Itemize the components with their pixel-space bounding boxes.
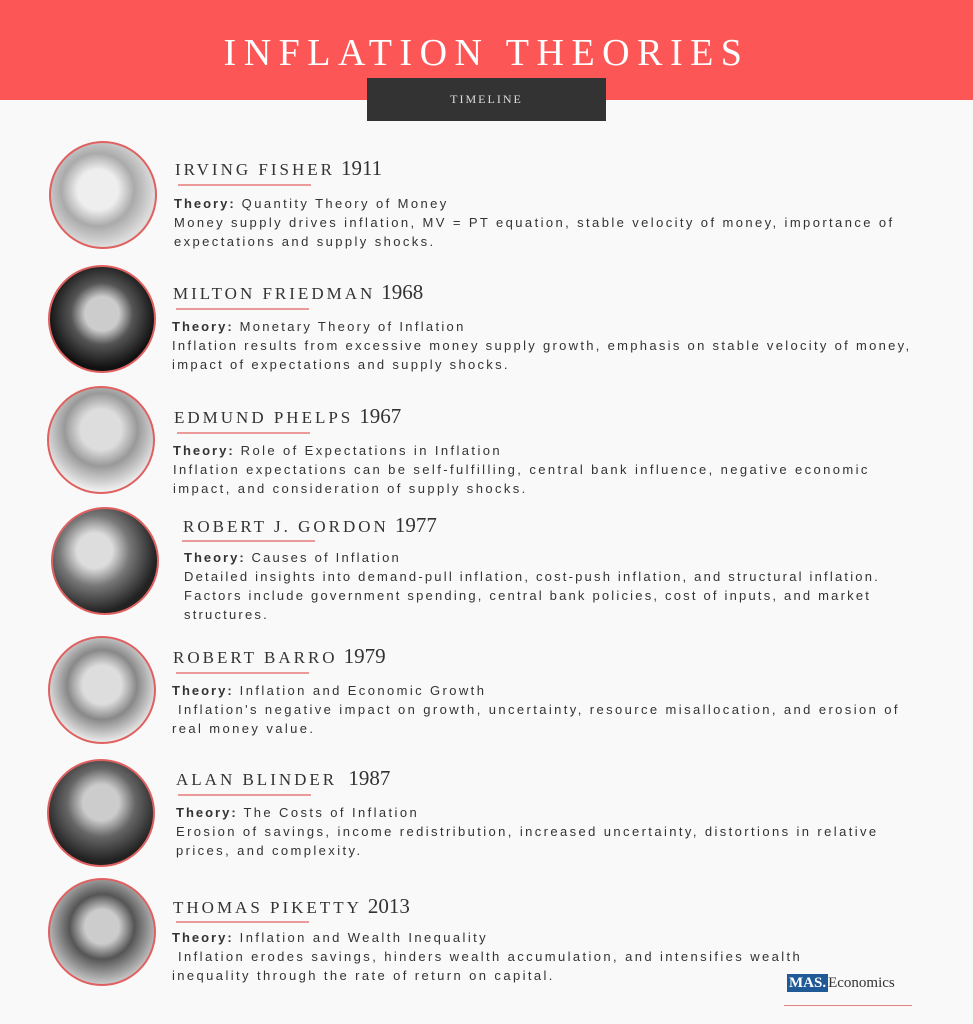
entry: Milton Friedman <box>48 265 911 373</box>
title: INFLATION THEORIES <box>224 32 749 74</box>
text: expectations and supply shocks. <box>174 234 436 249</box>
text: Factors include government spending, central bank policies, cost of inputs, and market <box>184 588 871 603</box>
entry: Edmund Phelps <box>47 386 870 496</box>
text: Theory: Causes of Inflation <box>184 550 401 565</box>
text: Detailed insights into demand-pull inflation, cost-push inflation, and structural inflation. <box>184 569 880 584</box>
text: Money supply drives inflation, MV = PT equation, stable velocity of money, importance of <box>174 215 895 230</box>
entry: Robert Barro <box>48 636 900 744</box>
text: Inflation erodes savings, hinders wealth accumulation, and intensifies wealth <box>178 949 802 964</box>
text: Theory: Role of Expectations in Inflation <box>173 443 502 458</box>
name: THOMAS PIKETTY 2013 <box>173 894 410 918</box>
text: Erosion of savings, income redistribution, increased uncertainty, distortions in relative <box>176 824 879 839</box>
text <box>174 196 895 249</box>
name: ALAN BLINDER 1987 <box>176 766 390 790</box>
portrait <box>48 636 156 744</box>
name: ROBERT J. GORDON 1977 <box>183 513 437 537</box>
text <box>172 683 900 736</box>
name: IRVING FISHER 1911 <box>175 156 382 180</box>
text: Inflation expectations can be self-fulfilling, central bank influence, negative economic <box>173 462 870 477</box>
text: Theory: Inflation and Wealth Inequality <box>172 930 488 945</box>
header band <box>0 0 973 100</box>
text: Inflation results from excessive money supply growth, emphasis on stable velocity of money, <box>172 338 911 353</box>
portrait <box>47 759 155 867</box>
entry: Alan Blinder <box>47 759 879 867</box>
text <box>173 443 870 496</box>
entry: Thomas Piketty <box>48 878 802 986</box>
text: Theory: Quantity Theory of Money <box>174 196 449 211</box>
text <box>172 319 911 372</box>
text: Theory: Inflation and Economic Growth <box>172 683 486 698</box>
entry: Robert J. Gordon <box>51 507 880 622</box>
text <box>172 930 802 983</box>
text: prices, and complexity. <box>176 843 362 858</box>
name: MILTON FRIEDMAN 1968 <box>173 280 423 304</box>
entry: Irving Fisher <box>49 141 895 249</box>
text <box>184 550 880 622</box>
text: Theory: The Costs of Inflation <box>176 805 419 820</box>
text: impact of expectations and supply shocks. <box>172 357 510 372</box>
portrait <box>49 141 157 249</box>
text: structures. <box>184 607 269 622</box>
text: Inflation's negative impact on growth, uncertainty, resource misallocation, and erosion of <box>178 702 900 717</box>
name: ROBERT BARRO 1979 <box>173 644 386 668</box>
portrait <box>48 878 156 986</box>
portrait <box>48 265 156 373</box>
portrait <box>51 507 159 615</box>
timeline label: TIMELINE <box>450 92 523 106</box>
text <box>176 805 879 858</box>
portrait <box>47 386 155 494</box>
text: inequality through the rate of return on capital. <box>172 968 555 983</box>
name: EDMUND PHELPS 1967 <box>174 404 401 428</box>
timeline label <box>367 78 606 121</box>
logo: MAS.Economics <box>789 975 895 991</box>
text: real money value. <box>172 721 315 736</box>
text: Theory: Monetary Theory of Inflation <box>172 319 466 334</box>
text: impact, and consideration of supply shocks. <box>173 481 528 496</box>
